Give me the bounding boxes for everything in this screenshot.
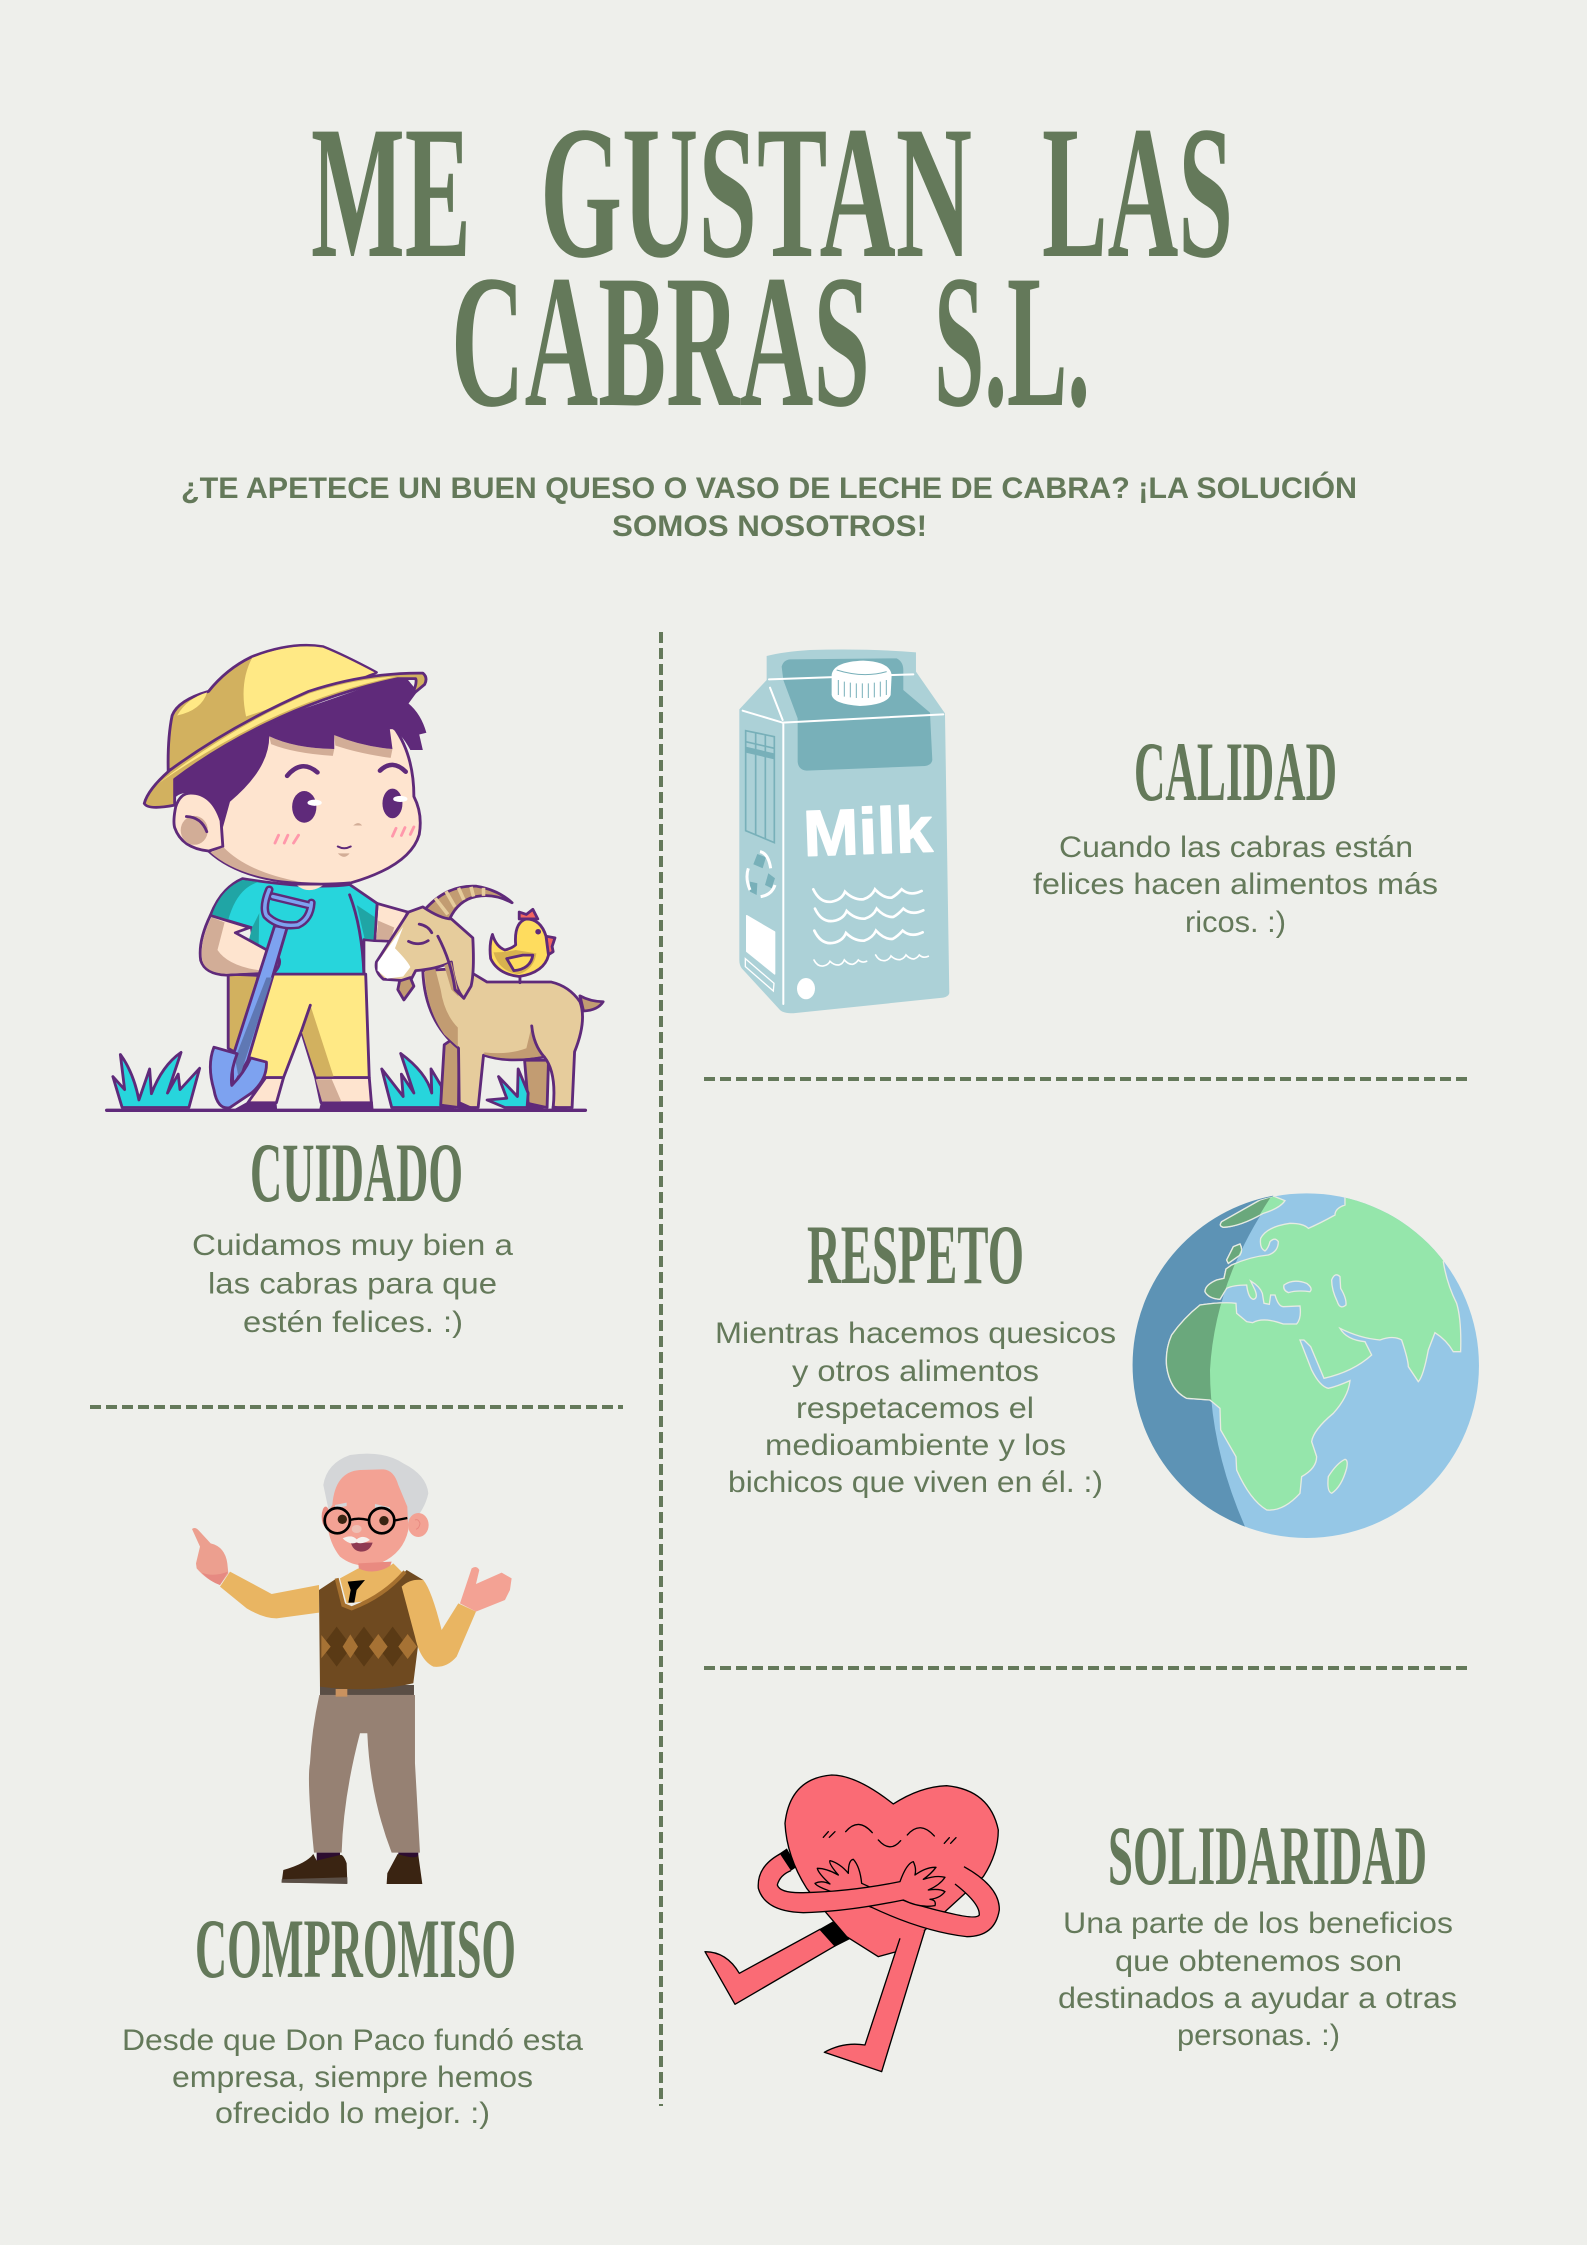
text: calidad: Cuando las cabras están (1059, 831, 1413, 864)
subtitle: ¿TE APETECE UN BUEN QUESO O VASO DE LECHE DE CABRA? ¡LA SOLUCIÓN (181, 471, 1357, 505)
shirt (210, 879, 377, 974)
heading: respeto: RESPETO (807, 1208, 1024, 1302)
text: calidad: ricos. :) (1185, 906, 1286, 939)
belt (320, 1685, 414, 1695)
panel: cuidado (107, 645, 603, 1339)
continents in shadow (1166, 1197, 1271, 1402)
hair back (323, 1454, 428, 1525)
title: ME (311, 88, 471, 298)
milk waves (813, 889, 928, 966)
hair (171, 674, 426, 828)
text: cuidado (192, 1229, 513, 1339)
icon: farmer boy with goat and chick (107, 645, 603, 1110)
left arm and pointing hand (220, 1572, 319, 1618)
ground line (107, 1105, 585, 1115)
icon: milk carton (739, 650, 949, 1013)
text: compromiso (122, 2024, 583, 2130)
text: solidaridad: que obtenemos son (1115, 1945, 1402, 1978)
inland seas (1284, 1275, 1346, 1307)
text: calidad (1033, 831, 1438, 939)
text: solidaridad: personas. :) (1177, 2019, 1340, 2052)
heading: calidad: CALIDAD (1134, 725, 1337, 819)
recycling symbol (750, 854, 775, 895)
text: respeto: respetacemos el (796, 1392, 1034, 1425)
text: respeto: bichicos que viven en él. :) (728, 1466, 1103, 1499)
tie (348, 1580, 365, 1603)
subtitle (181, 471, 1357, 543)
title: GUSTAN (540, 88, 972, 298)
text: calidad: felices hacen alimentos más (1033, 868, 1438, 901)
title: S.L. (934, 237, 1090, 447)
text: compromiso: empresa, siempre hemos (172, 2061, 533, 2094)
pants (309, 1695, 420, 1853)
panel: solidaridad (705, 1775, 1457, 2072)
arm with hand (200, 915, 280, 975)
face (327, 1469, 408, 1566)
eyes and expression (292, 791, 316, 823)
text: cuidado: estén felices. :) (243, 1306, 463, 1339)
title: LAS (1042, 88, 1233, 298)
arm crossing left to right (758, 1854, 945, 1913)
title (311, 88, 1233, 447)
ocean (1134, 1193, 1479, 1538)
goat legs (441, 1034, 459, 1108)
continents (1166, 1183, 1467, 1510)
text: cuidado: Cuidamos muy bien a (192, 1229, 513, 1262)
goat tail (580, 996, 603, 1011)
milk label: Milk (802, 792, 935, 870)
goat body (423, 969, 583, 1108)
carton cap (832, 661, 892, 706)
subtitle: SOMOS NOSOTROS! (612, 510, 927, 543)
shoes (282, 1854, 422, 1884)
text: solidaridad: destinados a ayudar a otras (1058, 1982, 1457, 2015)
right arm (375, 903, 408, 941)
night side shadow (1133, 1196, 1273, 1527)
infographic page (90, 130, 1479, 2129)
text: respeto: medioambiente y los (765, 1429, 1066, 1462)
title: CABRAS (451, 237, 870, 447)
icon: heart character hugging itself (705, 1775, 999, 2072)
grass tufts (113, 1052, 200, 1108)
shovel (232, 926, 287, 1087)
goat horn (426, 886, 512, 920)
icon: old man (192, 1454, 512, 1884)
text: cuidado: las cabras para que (208, 1268, 497, 1300)
panel: calidad (739, 650, 1438, 1013)
goat head (376, 907, 473, 998)
text: solidaridad (1058, 1907, 1457, 2052)
heading: cuidado: CUIDADO (250, 1126, 463, 1220)
text: compromiso: Desde que Don Paco fundó esta (122, 2024, 583, 2057)
glasses and facial features (335, 1503, 390, 1510)
text: respeto: y otros alimentos (792, 1355, 1039, 1388)
text: respeto (715, 1317, 1116, 1499)
heading: compromiso: COMPROMISO (195, 1902, 516, 1996)
hat (168, 645, 376, 771)
panel: compromiso (122, 1454, 583, 2130)
heart body (785, 1775, 998, 1957)
chick (516, 977, 524, 983)
arm band (778, 1849, 796, 1872)
head and face (198, 728, 420, 884)
shirt collar (340, 1563, 403, 1603)
icon: earth globe (1133, 1183, 1479, 1538)
front leg (824, 1930, 925, 2072)
back leg (819, 1922, 850, 1946)
arm crossing right to left (815, 1859, 999, 1937)
vest (319, 1570, 423, 1689)
text: compromiso: ofrecido lo mejor. :) (215, 2097, 490, 2130)
panel: respeto (715, 1183, 1479, 1538)
white label (747, 916, 775, 974)
text: respeto: Mientras hacemos quesicos (715, 1317, 1116, 1350)
text: solidaridad: Una parte de los beneficios (1063, 1907, 1453, 1940)
right arm and open hand (460, 1567, 512, 1612)
legs and shoes (248, 1078, 284, 1103)
nutrition table (746, 731, 774, 843)
smiling face (823, 1824, 956, 1847)
